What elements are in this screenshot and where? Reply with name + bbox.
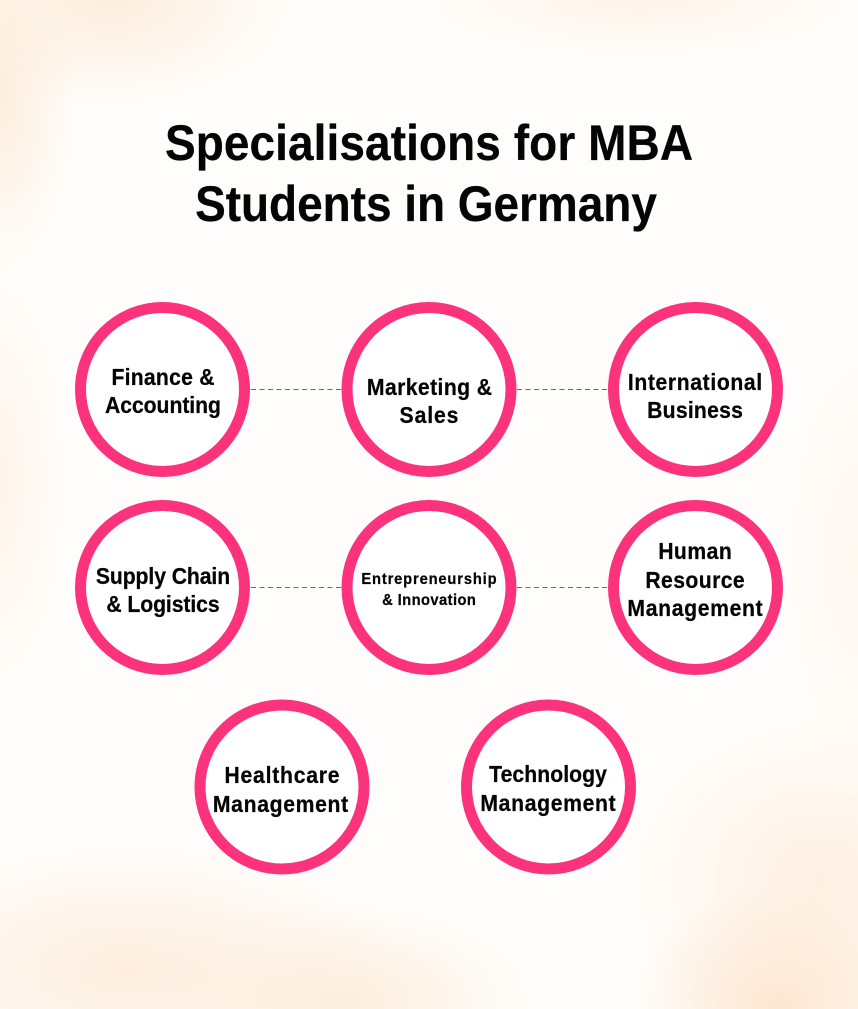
node: Healthcare Management: [200, 705, 364, 869]
node: Marketing & Sales: Sales: [400, 402, 458, 428]
node: International Business: [614, 308, 778, 472]
node: Marketing & Sales: Marketing &: [367, 374, 492, 400]
node: Entrepreneurship & Innovation: [347, 506, 511, 670]
node: Supply Chain & Logistics: [80, 506, 244, 670]
node: Entrepreneurship & Innovation: & Innovation: [382, 591, 476, 609]
connector: row 2 left: [251, 586, 341, 588]
title: Students in Germany: [195, 177, 657, 232]
title: [165, 116, 693, 232]
connector: row 1 right: [517, 388, 608, 390]
connector: row 1 left: [251, 388, 341, 390]
node: International Business: Business: [647, 397, 743, 423]
node: International Business: International: [628, 369, 762, 395]
connector: row 2 right: [517, 586, 608, 588]
node: Marketing & Sales: [347, 308, 511, 472]
node: Finance & Accounting: Accounting: [105, 392, 221, 418]
node: Human Resource Management: Human: [658, 538, 732, 564]
node: Finance & Accounting: [80, 308, 244, 472]
node: Healthcare Management: Management: [213, 791, 349, 817]
node: Healthcare Management: Healthcare: [225, 762, 340, 788]
node: Technology Management: [466, 705, 630, 869]
node: Supply Chain & Logistics: Supply Chain: [96, 563, 230, 589]
node: Human Resource Management: Management: [627, 595, 763, 621]
title: Specialisations for MBA: [165, 116, 693, 171]
node: Human Resource Management: [614, 506, 778, 670]
node: Finance & Accounting: Finance &: [111, 364, 215, 390]
node: Supply Chain & Logistics: & Logistics: [106, 591, 220, 617]
node: Technology Management: Technology: [489, 761, 608, 787]
node: Entrepreneurship & Innovation: Entrepreneurship: [361, 570, 497, 588]
node: Human Resource Management: Resource: [645, 567, 745, 593]
node: Technology Management: Management: [480, 790, 616, 816]
